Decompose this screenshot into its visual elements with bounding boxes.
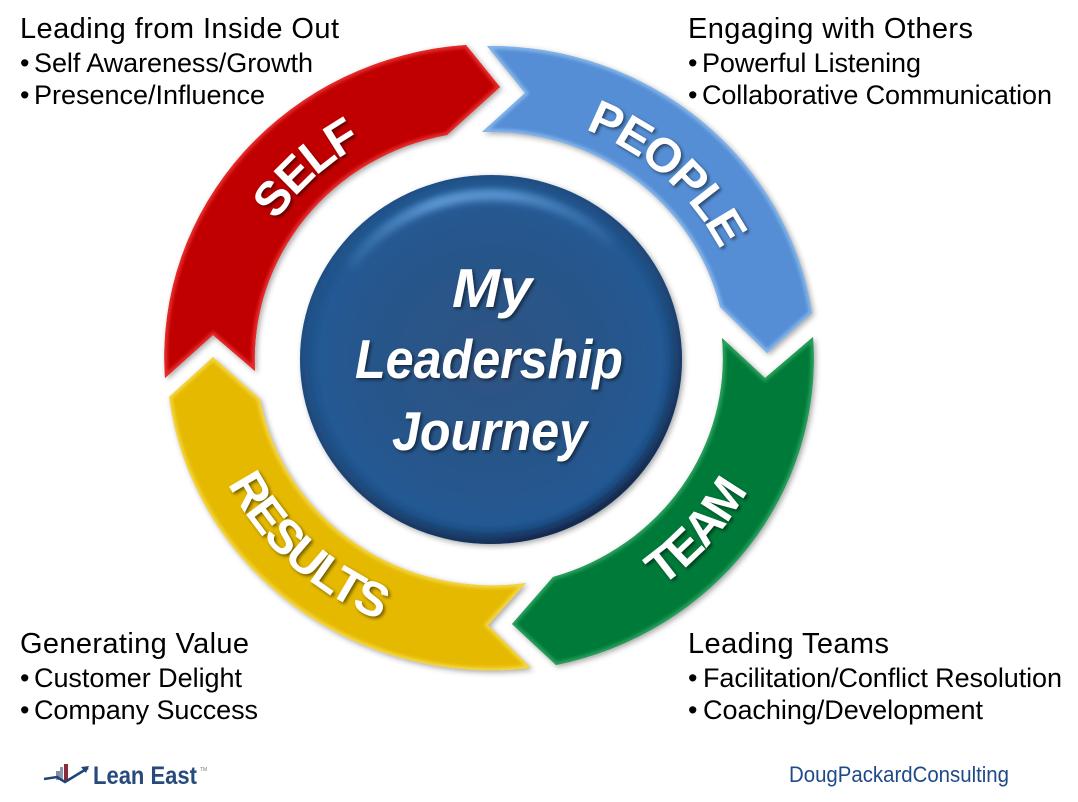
arrow: RESULTS	[168, 357, 534, 676]
text block: Leading Teams: •	[688, 663, 697, 693]
text block: Generating Value: Company Success	[34, 695, 258, 725]
text block: Generating Value: Generating Value	[20, 628, 249, 660]
logo: Lean East	[44, 762, 207, 790]
text block: Leading from Inside Out: •	[20, 80, 29, 110]
arrow: PEOPLE	[482, 44, 817, 357]
text block: Engaging with Others: •	[688, 80, 697, 110]
text block: Engaging with Others: •	[688, 48, 697, 78]
label: RESULTS: RESULTS	[229, 470, 392, 620]
text block: Leading Teams: •	[688, 695, 697, 725]
text block: Generating Value: •	[20, 663, 29, 693]
label: SELF: SELF	[255, 116, 357, 220]
text block: Leading from Inside Out	[20, 13, 339, 110]
text block: Leading from Inside Out: •	[20, 48, 29, 78]
arrow: TEAM	[512, 337, 820, 670]
center title	[355, 257, 623, 462]
text block: Leading from Inside Out: Presence/Influence	[34, 80, 265, 110]
text block: Engaging with Others: Engaging with Others	[688, 13, 973, 45]
text block: Engaging with Others	[688, 13, 1052, 110]
logo: Lean East: Lean East	[93, 762, 198, 790]
center title: Journey	[392, 400, 589, 462]
text block: Engaging with Others: Powerful Listening	[702, 48, 921, 78]
text block: Leading from Inside Out: Self Awareness/Growth	[34, 48, 313, 78]
text: DougPackardConsulting: DougPackardConsulting	[789, 762, 1009, 787]
text block: Leading from Inside Out: Leading from Inside Out	[20, 13, 339, 45]
text block: Engaging with Others: Collaborative Communication	[702, 80, 1052, 110]
text block: Leading Teams: Facilitation/Conflict Resolution	[703, 663, 1062, 693]
label: PEOPLE: PEOPLE	[588, 100, 751, 251]
text block: Generating Value: •	[20, 695, 29, 725]
label: TEAM: TEAM	[642, 475, 750, 582]
center disc	[300, 175, 682, 544]
text block: Leading Teams: Leading Teams	[688, 628, 889, 660]
text block: Leading Teams	[688, 628, 1062, 725]
text block: Leading Teams: Coaching/Development	[703, 695, 983, 725]
arrow: SELF	[162, 44, 504, 381]
center title: Leadership	[355, 328, 623, 390]
logo: Lean East: TM	[200, 767, 207, 773]
icon: chart with arrow	[44, 764, 89, 782]
text block: Generating Value	[20, 628, 258, 725]
text block: Generating Value: Customer Delight	[34, 663, 242, 693]
center title: My	[452, 257, 535, 319]
